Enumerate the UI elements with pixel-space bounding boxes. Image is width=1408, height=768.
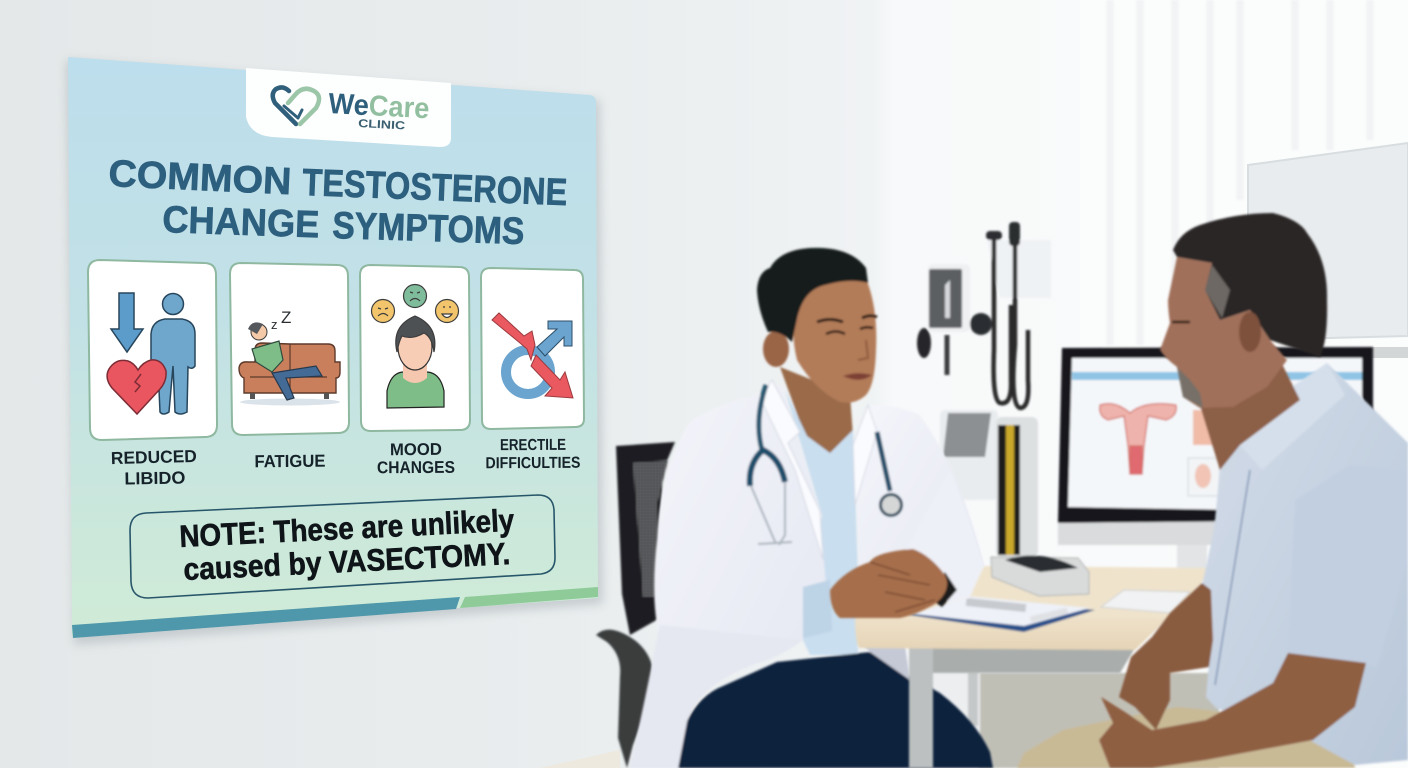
title xyxy=(108,153,568,253)
hair xyxy=(757,248,868,342)
coat skirt shade xyxy=(630,625,803,768)
card: fatigue xyxy=(230,263,349,471)
computer monitor xyxy=(1058,347,1373,585)
title: SYMPTOMS xyxy=(332,205,525,253)
doctor sleeve and clasped hands xyxy=(830,470,984,618)
title: TESTOSTERONE xyxy=(302,162,568,214)
trousers xyxy=(1017,707,1355,768)
stethoscope xyxy=(750,385,902,545)
label: LIBIDO xyxy=(124,467,186,489)
label xyxy=(377,440,455,477)
sphygmomanometer xyxy=(996,417,1038,557)
hair xyxy=(1173,213,1327,357)
face xyxy=(794,277,876,403)
logo subtitle: CLINIC xyxy=(358,118,405,132)
card: reduced libido xyxy=(88,260,217,489)
label xyxy=(111,446,197,489)
bottom teal stripe xyxy=(72,597,460,638)
bottom green stripe xyxy=(460,587,598,608)
face xyxy=(1160,257,1287,408)
icon: broken heart xyxy=(107,360,166,414)
zzz: z xyxy=(271,317,278,332)
logo wordmark: WeCare xyxy=(328,88,430,125)
icon: mood faces and man xyxy=(372,284,458,408)
whiteboard on wall xyxy=(1248,143,1408,358)
callout note: caused by VASECTOMY. xyxy=(183,536,511,587)
card: mood changes xyxy=(360,265,470,477)
label: MOOD xyxy=(390,440,442,459)
label: REDUCED xyxy=(111,446,197,468)
label: ERECTILE xyxy=(500,437,566,454)
lapel xyxy=(760,380,823,560)
title: CHANGE xyxy=(162,199,320,246)
neck xyxy=(780,367,853,456)
icon: down arrow xyxy=(111,293,143,352)
wall under desk xyxy=(932,672,1219,768)
logo card xyxy=(246,68,451,147)
shirt xyxy=(1201,363,1408,765)
office chair xyxy=(596,442,675,768)
aneroid gauge xyxy=(928,264,970,332)
neck xyxy=(1200,360,1300,470)
icon: heart logo xyxy=(273,87,319,124)
icon: sleeping man on sofa: Z xyxy=(281,308,291,327)
pants xyxy=(678,652,993,768)
poster shadow xyxy=(66,60,603,645)
wall-mounted diagnostic set xyxy=(917,222,1051,500)
ear xyxy=(763,331,789,367)
desk xyxy=(855,417,1215,768)
cuff xyxy=(803,580,832,638)
patient xyxy=(1017,213,1408,768)
clipboard xyxy=(909,598,1095,632)
label xyxy=(485,437,581,472)
lab coat xyxy=(630,385,826,768)
doctor body xyxy=(630,248,993,768)
label: CHANGES xyxy=(377,458,455,477)
uterus diagram xyxy=(1100,404,1240,496)
ECG monitor xyxy=(940,410,998,500)
card: erectile difficulties xyxy=(481,268,584,472)
label: FATIGUE xyxy=(254,451,326,471)
near arm xyxy=(1099,653,1366,768)
icon: broken male symbol xyxy=(492,313,573,398)
coat right xyxy=(855,405,984,612)
icon: sleeping man on sofa xyxy=(239,308,340,406)
ear xyxy=(1239,312,1261,352)
icon: person xyxy=(151,294,195,414)
title: COMMON xyxy=(108,153,292,203)
callout note: NOTE: These are unlikely xyxy=(179,503,516,554)
poster xyxy=(66,57,603,645)
label: DIFFICULTIES xyxy=(485,455,581,472)
far arm xyxy=(1119,583,1213,730)
wall unit xyxy=(987,240,1051,298)
poster board xyxy=(68,57,598,636)
callout note xyxy=(130,495,555,598)
cables xyxy=(994,240,1011,403)
keyboard xyxy=(1101,590,1190,613)
shirt xyxy=(785,390,858,655)
